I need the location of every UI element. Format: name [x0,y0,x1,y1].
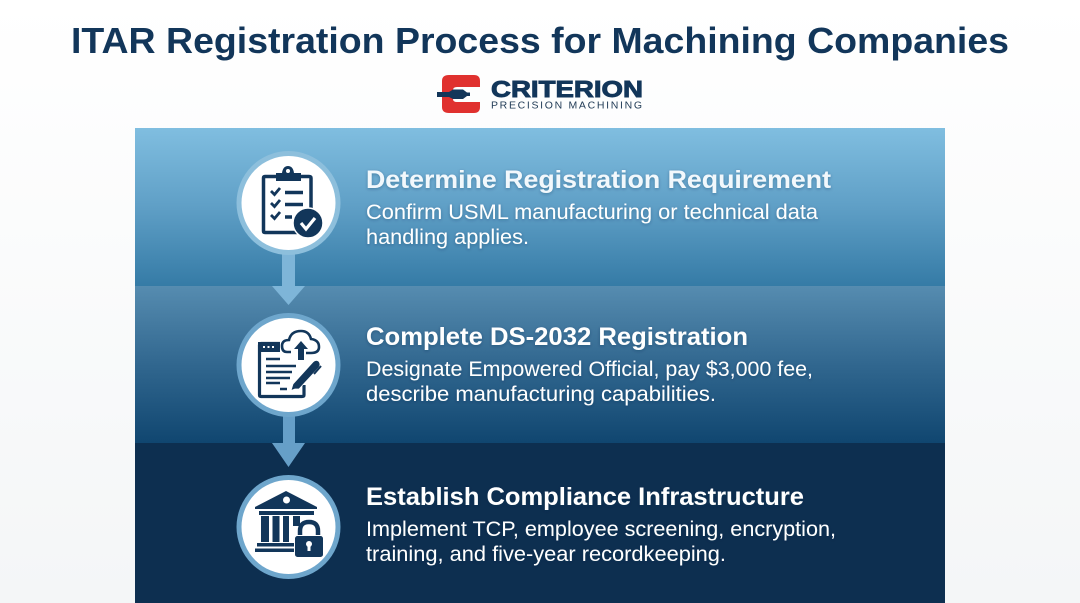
panel: step 2 band [135,286,945,443]
body: step 1 line 1: Confirm USML manufacturing or technical data [366,201,818,224]
icon: clipboard with checklist [236,151,340,255]
icon: red C with spindle [437,75,480,113]
text block: step 2 [366,323,813,406]
icon: form with cloud upload and pen [236,313,340,417]
logo: Criterion Precision Machining [437,75,643,113]
logo wordmark: CRITERION [491,76,643,102]
body: step 3 line 2: training, and five-year recordkeeping. [366,543,726,566]
heading: step 2: Complete DS-2032 Registration [366,323,748,351]
body: step 2 line 2: describe manufacturing capabilities. [366,383,716,406]
body: step 2 line 1: Designate Empowered Official, pay $3,000 fee, [366,358,813,381]
body: step 1 line 2: handling applies. [366,226,529,249]
icon: bank building with padlock [236,475,340,579]
title: ITAR Registration Process for Machining Companies [71,20,1009,61]
panel: step 3 band [135,443,945,603]
text block: step 3 [366,483,836,566]
heading: step 3: Establish Compliance Infrastructure [366,483,804,511]
arrow: step 1 to step 2 [272,250,305,305]
heading: step 1: Determine Registration Requirement [366,166,832,194]
logo tagline: PRECISION MACHINING [491,100,642,112]
body: step 3 line 1: Implement TCP, employee screening, encryption, [366,518,836,541]
arrow: step 2 to step 3 [272,412,305,467]
panel: step 1 band [135,128,945,286]
text block: step 1 [366,166,832,249]
